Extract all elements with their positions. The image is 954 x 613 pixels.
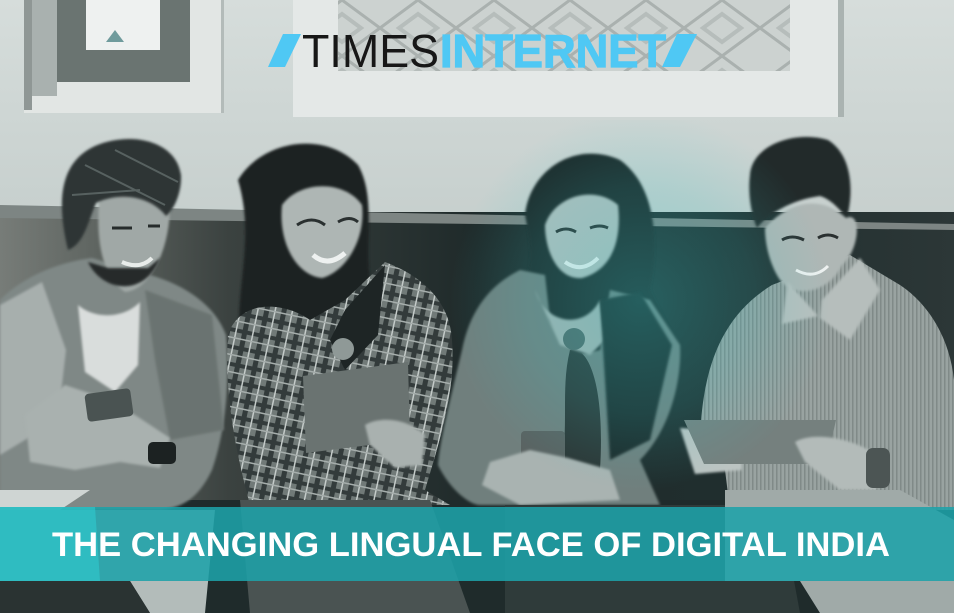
logo: INTERNET bbox=[440, 25, 666, 77]
person 3: woman with phone bbox=[438, 154, 800, 613]
person 1: man in turban bbox=[0, 139, 227, 613]
person 2: woman with tablet bbox=[227, 144, 470, 613]
left picture frame bbox=[24, 0, 224, 113]
wall background bbox=[0, 0, 954, 225]
title band bbox=[0, 507, 954, 581]
title band: THE CHANGING LINGUAL FACE OF DIGITAL INDIA bbox=[52, 526, 890, 564]
sofa bbox=[0, 205, 954, 613]
person 4: man with tablet bbox=[680, 137, 954, 613]
logo: TIMES bbox=[302, 25, 439, 77]
teal colour wash bbox=[440, 120, 840, 510]
logo bbox=[268, 25, 697, 77]
right picture frame bbox=[293, 0, 844, 117]
